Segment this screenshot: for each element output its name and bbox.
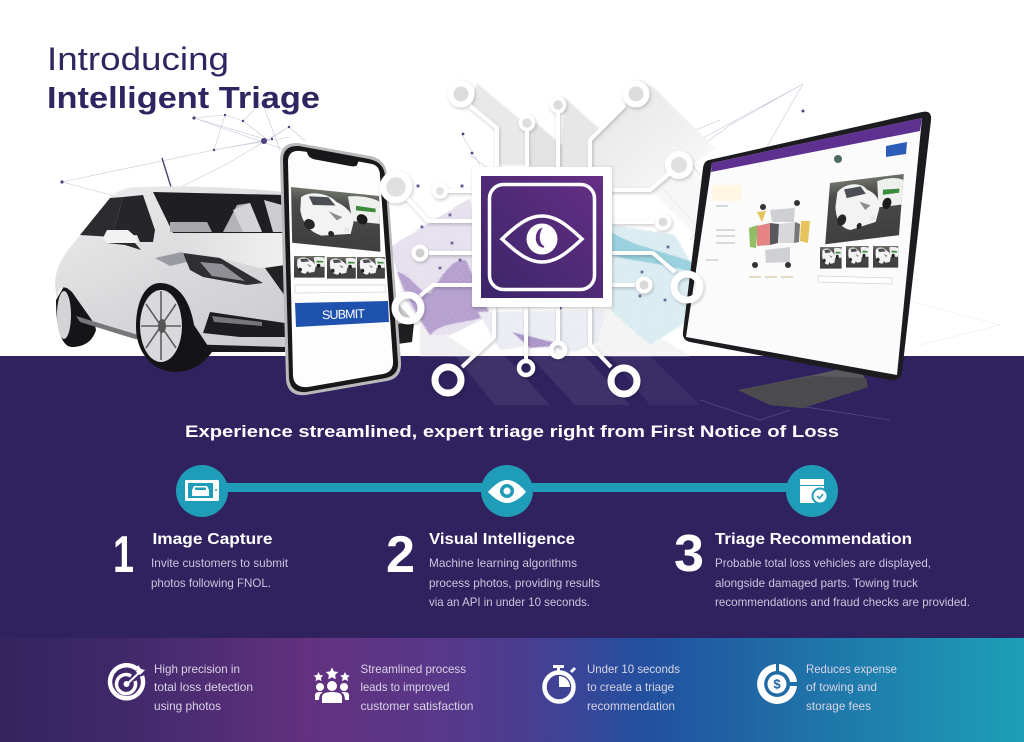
car front right of phone bbox=[388, 322, 414, 345]
benefit text: expense: of towing and bbox=[806, 680, 877, 694]
side sill bbox=[76, 316, 183, 345]
windshield bbox=[153, 192, 285, 233]
upper grille bbox=[265, 265, 285, 296]
icon: target bbox=[110, 665, 145, 698]
ring nodes bbox=[383, 84, 700, 394]
icon: people and stars bbox=[314, 668, 350, 703]
hood bbox=[170, 233, 285, 268]
timeline connector bbox=[222, 483, 792, 492]
step 3 text: recommendations and fraud checks are provided. bbox=[715, 595, 970, 609]
footer gradient band bbox=[0, 638, 1024, 742]
step 2 text: via an API in under 10 seconds. bbox=[429, 595, 590, 609]
photo thumbnails bbox=[294, 256, 325, 278]
main photo bbox=[825, 174, 904, 244]
white header background bbox=[0, 0, 1024, 356]
benefit text: expense: storage fees bbox=[806, 699, 871, 713]
step 2 text bbox=[429, 556, 600, 609]
network lines bbox=[60, 84, 1000, 420]
front bumper underside bbox=[183, 344, 285, 352]
rear tyre bbox=[56, 276, 96, 347]
chip rounded outline bbox=[490, 184, 594, 290]
icon: dollar donut bbox=[757, 664, 797, 704]
side windows bbox=[80, 197, 123, 237]
monitor bbox=[683, 112, 931, 408]
title bbox=[47, 41, 320, 115]
step 2 text: process photos, providing results bbox=[429, 576, 600, 590]
subheading: Experience streamlined, expert triage right from First Notice of Loss bbox=[185, 422, 839, 441]
lower grille bbox=[203, 312, 285, 337]
benefit text: satisfaction bbox=[360, 662, 474, 713]
step 1 bbox=[113, 526, 289, 590]
shadow: top left connectors bbox=[470, 83, 556, 165]
step 2 bbox=[386, 526, 600, 609]
step 3 bbox=[674, 525, 970, 609]
benefit text: satisfaction: customer satisfaction bbox=[360, 699, 474, 713]
benefit text: expense bbox=[806, 662, 897, 713]
step 1 heading: Image Capture bbox=[152, 531, 273, 548]
eye icon bbox=[502, 216, 582, 262]
benefit text: precision: using photos bbox=[154, 699, 221, 713]
benefit text: satisfaction: Streamlined process bbox=[360, 662, 466, 676]
chip with eye bbox=[472, 167, 612, 307]
shadow: top right connector bbox=[592, 80, 715, 190]
step 1 text: Invite customers to submit bbox=[151, 556, 289, 570]
step 2 heading: Visual Intelligence bbox=[429, 531, 575, 548]
headlight bbox=[183, 253, 263, 285]
left connectors bbox=[408, 191, 474, 296]
benefit text: satisfaction: leads to improved bbox=[360, 680, 450, 694]
phone notch bbox=[306, 150, 359, 166]
legend dots bbox=[749, 276, 793, 278]
step 3 text: Probable total loss vehicles are displayed, bbox=[715, 556, 931, 570]
dark purple wave bbox=[397, 260, 490, 335]
antenna of car bbox=[162, 158, 171, 187]
step 2 text: Machine learning algorithms bbox=[429, 556, 577, 570]
title line 2: Intelligent Triage bbox=[47, 80, 320, 115]
view button bbox=[818, 276, 892, 284]
uploaded photo bbox=[291, 187, 380, 252]
top connectors bbox=[470, 105, 625, 168]
step 3 text: alongside damaged parts. Towing truck bbox=[715, 576, 918, 590]
step 3 heading: Triage Recommendation bbox=[715, 531, 912, 548]
step 1 text: photos following FNOL. bbox=[151, 576, 271, 590]
thumbnails bbox=[820, 246, 898, 269]
car damage diagram bbox=[749, 200, 810, 268]
benefit text: precision: High precision in bbox=[154, 662, 240, 676]
benefit text: speed: to create a triage bbox=[587, 680, 674, 694]
screen header bbox=[711, 118, 922, 172]
step 2 icon: eye bbox=[481, 465, 533, 517]
number 2: 2 bbox=[386, 526, 415, 584]
bottom mesh bbox=[478, 310, 606, 352]
phone frame bbox=[280, 143, 401, 395]
summary avatar bbox=[834, 155, 842, 163]
node dots bbox=[416, 184, 670, 310]
shadow: lower connectors on white bbox=[596, 307, 690, 356]
shadow: lower connectors on band bbox=[455, 356, 550, 405]
number 1: 1 bbox=[113, 526, 134, 584]
chip white body bbox=[472, 167, 612, 307]
number 3: 3 bbox=[674, 525, 704, 583]
sidebar text lines bbox=[706, 206, 735, 260]
step 3 icon: window check bbox=[786, 465, 838, 517]
icon: stopwatch bbox=[544, 665, 575, 702]
long circuit shadows bbox=[420, 80, 730, 405]
car photo bbox=[55, 186, 414, 372]
purple mesh left bbox=[390, 198, 490, 335]
phone bbox=[280, 143, 401, 395]
icon: dollar donut: $ bbox=[773, 676, 781, 692]
rear rim bbox=[57, 291, 71, 339]
benefit text: speed: Under 10 seconds bbox=[587, 662, 680, 676]
bottom connectors bbox=[462, 305, 611, 367]
header button bbox=[886, 142, 907, 157]
damage crease bbox=[155, 252, 187, 266]
step 1 icon: tablet car bbox=[176, 465, 228, 517]
mesh wave background bbox=[390, 184, 695, 352]
purple main band bbox=[0, 356, 1024, 638]
monitor stand bbox=[738, 368, 868, 408]
benefit text: expense: Reduces expense bbox=[806, 662, 897, 676]
benefit text: speed: recommendation bbox=[587, 699, 675, 713]
right connectors bbox=[610, 173, 675, 285]
car body bbox=[55, 186, 414, 347]
benefit text: precision: total loss detection bbox=[154, 680, 253, 694]
chip purple face bbox=[481, 176, 603, 298]
front tyre bbox=[136, 283, 212, 372]
submit label: SUBMIT bbox=[322, 307, 366, 322]
step 1 text bbox=[151, 556, 289, 590]
blue mesh right bbox=[612, 225, 695, 345]
phone screen bbox=[288, 151, 393, 387]
wing mirror bbox=[103, 230, 137, 243]
submit button bbox=[295, 301, 389, 327]
front rim bbox=[140, 290, 182, 362]
add photos button bbox=[295, 285, 386, 293]
step 3 text bbox=[715, 556, 970, 609]
monitor screen bbox=[686, 118, 922, 375]
benefit text: precision bbox=[154, 662, 253, 713]
benefit text: speed bbox=[587, 662, 680, 713]
monitor frame bbox=[683, 112, 931, 380]
highlighted field bbox=[712, 185, 742, 201]
circuit connectors bbox=[383, 84, 700, 394]
title line 1: Introducing bbox=[47, 41, 229, 77]
